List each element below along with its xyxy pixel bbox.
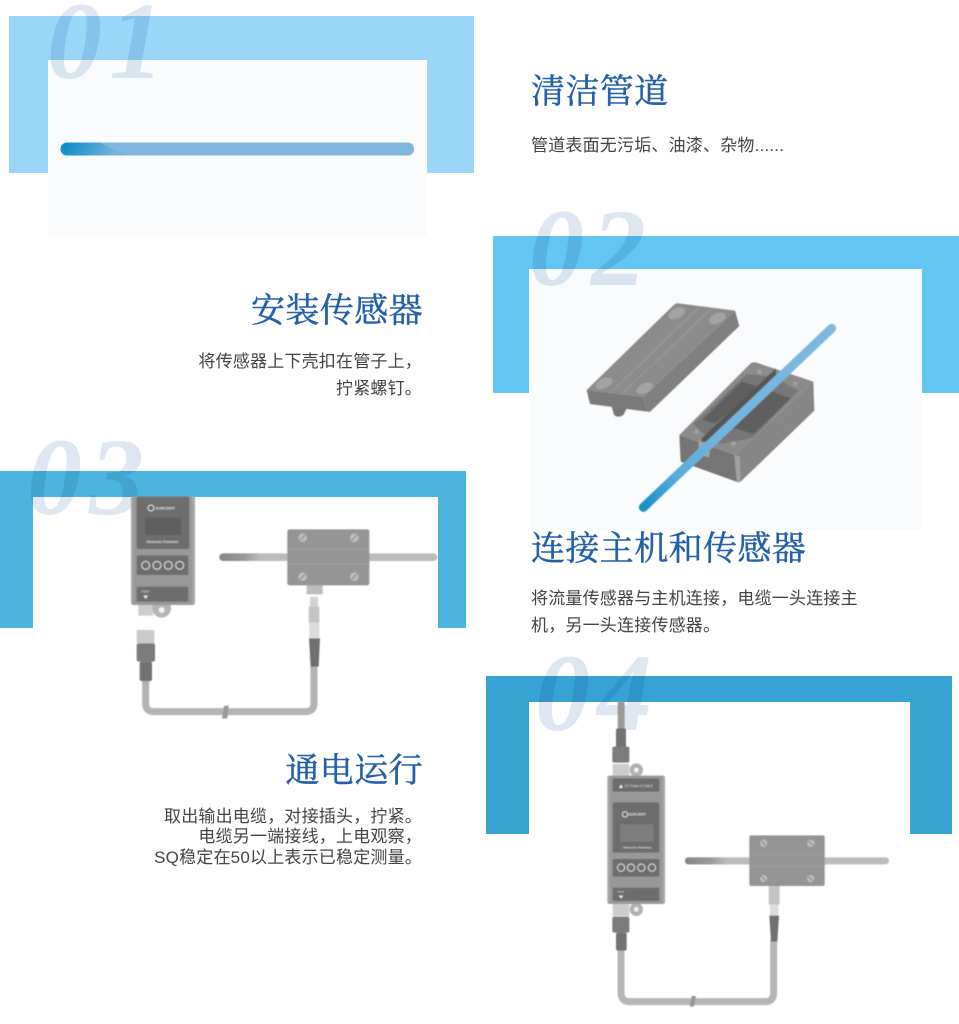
sensor connector [769, 886, 780, 942]
text: step 3 description: 将流量传感器与主机连接，电缆一头连接主 [531, 589, 858, 608]
sensor body [749, 835, 825, 886]
sensor connector [307, 585, 323, 667]
panel: step 4 frame [486, 676, 952, 834]
text: step 2 description: 将传感器上下壳扣在管子上， [198, 352, 422, 371]
illustration: sensor shell and pipe [587, 303, 832, 507]
text: step 2 description [198, 352, 422, 398]
text: step 2 description: 拧紧螺钉。 [336, 379, 422, 398]
step number 04: 04 [535, 632, 659, 754]
output cable [621, 940, 774, 1002]
meter body: DC Power & Output [625, 784, 653, 788]
text: step 4 description: 取出输出电缆，对接插头，拧紧。 [164, 807, 422, 826]
illustration: meter and sensor disconnected [131, 497, 437, 719]
text: step 3 description: 机，另一头连接传感器。 [531, 616, 720, 635]
heading: step 1: 清洁管道 [531, 73, 669, 111]
cable [146, 665, 314, 712]
sensor body [287, 529, 369, 585]
text: step 4 description [154, 807, 422, 867]
text: step 4 description: 电缆另一端接线，上电观察， [198, 827, 422, 846]
power cable [618, 702, 625, 730]
meter body: Ultrasonic Flowmeter [146, 540, 179, 544]
pipe [219, 553, 437, 561]
panel: step 1 image area [48, 60, 427, 237]
text: step 3 description [531, 589, 858, 635]
heading: step 2: 安装传感器 [251, 292, 423, 330]
meter body: SURCENT [628, 813, 647, 817]
step number 03: 03 [27, 416, 151, 538]
step number 02: 02 [529, 187, 653, 309]
illustration: meter and sensor connected [607, 702, 889, 1007]
lower connector [612, 917, 629, 951]
panel: step 3 frame [0, 471, 466, 628]
pipe [685, 857, 889, 864]
meter body: Input [617, 890, 624, 894]
heading: step 3: 连接主机和传感器 [531, 530, 806, 568]
meter body: Input [142, 589, 149, 593]
icon: clean pipe highlight [60, 142, 125, 156]
left connector [137, 630, 155, 681]
icon: clean pipe [61, 142, 414, 156]
upper connector [612, 728, 629, 763]
pipe [643, 328, 832, 507]
panel: step 2 image area [529, 269, 922, 530]
sensor lid [587, 303, 739, 417]
meter body: Ultrasonic Flowmeter [623, 845, 653, 849]
panel: step 2 frame [493, 236, 959, 393]
heading: step 4: 通电运行 [285, 752, 423, 790]
text: step 4 description: SQ稳定在50以上表示已稳定测量。 [154, 848, 422, 867]
text: step 1 description: 管道表面无污垢、油漆、杂物...... [531, 136, 784, 155]
panel: step 1 frame [9, 16, 474, 173]
sensor base [679, 362, 814, 482]
meter body [607, 763, 665, 916]
meter body [131, 497, 195, 618]
meter body: SURCENT [156, 505, 175, 510]
